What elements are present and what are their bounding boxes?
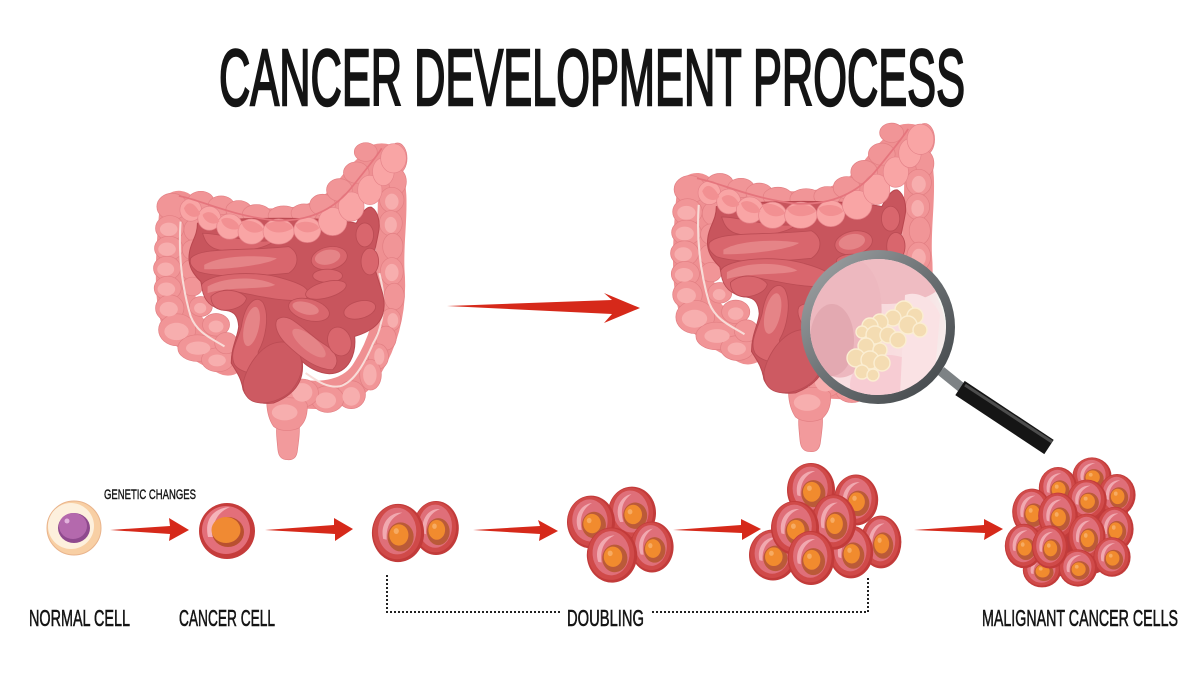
arrow: cancer cell to two cells <box>265 518 353 541</box>
arrow: eight cells to malignant cells <box>914 519 1003 540</box>
cell stage: eight cells <box>749 463 901 585</box>
lens view with tumour cluster <box>810 259 946 395</box>
large arrow between intestines <box>447 293 640 323</box>
arrow: two cells to four cells <box>473 520 558 541</box>
label: genetic changes: GENETIC CHANGES <box>104 487 196 502</box>
doubling bracket <box>387 575 868 612</box>
magnifier handle <box>941 371 1052 447</box>
icon: magnifying glass over tumour <box>801 250 1052 447</box>
arrow: normal to cancer cell <box>110 518 189 541</box>
cell stage: four cells <box>563 481 677 585</box>
arrow: four cells to eight cells <box>673 519 761 540</box>
label: cancer cell: CANCER CELL <box>179 605 275 631</box>
label: normal cell: NORMAL CELL <box>29 605 130 631</box>
cell stage: normal cell <box>47 501 101 555</box>
cell stage: malignant cancer cells cluster <box>1005 457 1136 587</box>
label: doubling: DOUBLING <box>567 605 644 631</box>
cell stage: cancer cell <box>199 503 255 559</box>
intestine with tumour <box>671 123 935 452</box>
cell stage: two cells <box>372 501 459 562</box>
healthy large intestine and small intestine <box>154 143 407 460</box>
